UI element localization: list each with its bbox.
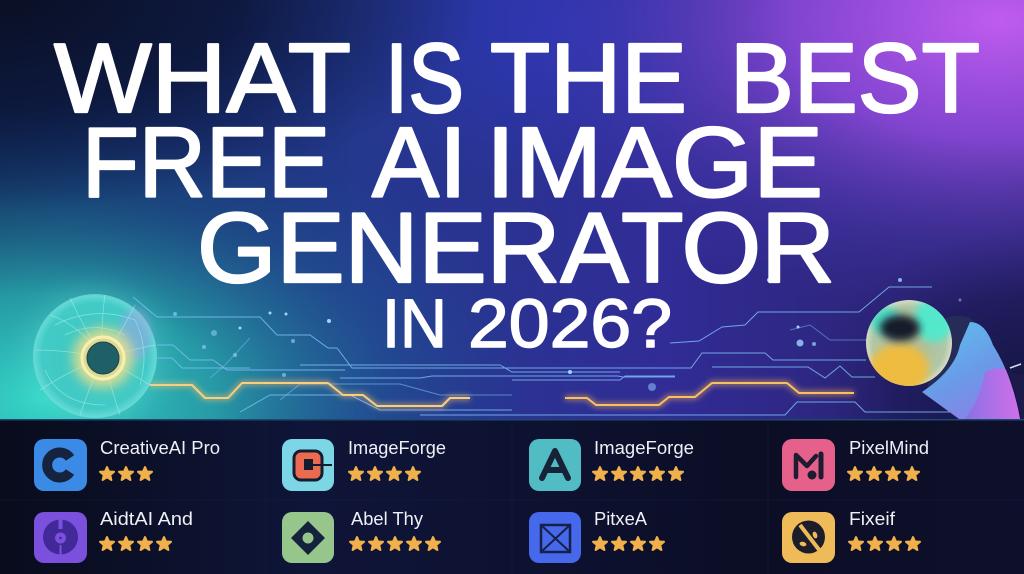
title: WHAT (54, 23, 351, 133)
tool: Abel Thy (282, 509, 440, 563)
right metallic sphere (866, 300, 952, 386)
tool: Fixeif (782, 509, 920, 563)
panel: tools list (0, 419, 1024, 574)
tool: AidtAI And: AidtAI And (100, 509, 193, 529)
title: IS (385, 23, 464, 133)
glowing orange circuit traces (150, 383, 854, 406)
title: AI (372, 106, 467, 218)
tool: PixelMind: PixelMind (849, 438, 929, 458)
tool: AidtAI And (34, 509, 193, 563)
title: IN (382, 285, 447, 362)
title: 2026? (468, 285, 672, 362)
circuit lines (133, 287, 960, 415)
tool: ImageForge (teal-blue) (282, 438, 446, 491)
title: IMAGE (486, 106, 823, 218)
circuit nodes (173, 278, 962, 391)
tool: PixelMind (782, 438, 929, 491)
left neural orb (29, 290, 161, 422)
tool: PitxeA: PitxeA (594, 509, 647, 529)
background gradient (0, 0, 1024, 420)
tool: ImageForge (A icon) (529, 438, 694, 491)
tool: ImageForge (A icon): ImageForge (594, 438, 694, 458)
tool: CreativeAI Pro: CreativeAI Pro (100, 438, 220, 458)
right robot arm (922, 316, 1024, 419)
tool: Abel Thy: Abel Thy (351, 509, 423, 529)
tool: CreativeAI Pro (34, 438, 220, 491)
tool: PitxeA (529, 509, 664, 563)
title: THE (490, 23, 687, 133)
title: GENERATOR (197, 192, 835, 303)
title: FREE (82, 106, 330, 218)
title (54, 23, 980, 362)
tool: ImageForge (teal-blue): ImageForge (348, 438, 446, 458)
title: BEST (730, 23, 980, 133)
tool: Fixeif: Fixeif (849, 509, 896, 529)
